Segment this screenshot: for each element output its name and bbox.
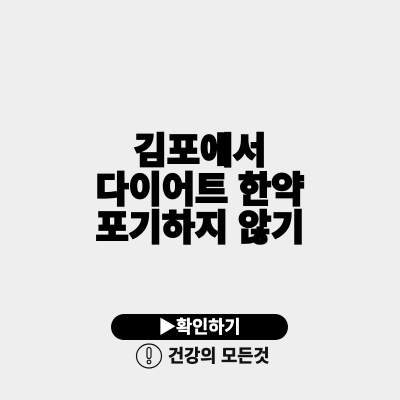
title — [96, 130, 304, 248]
button: confirm: ▶확인하기 — [159, 317, 240, 337]
title: 다이어트 한약 — [96, 169, 304, 210]
icon: exclamation circle — [136, 343, 162, 369]
title: 포기하지 않기 — [96, 207, 304, 248]
title: 김포에서 — [134, 130, 266, 171]
button: confirm — [111, 314, 288, 340]
brand label: 건강의 모든것 — [168, 346, 269, 366]
